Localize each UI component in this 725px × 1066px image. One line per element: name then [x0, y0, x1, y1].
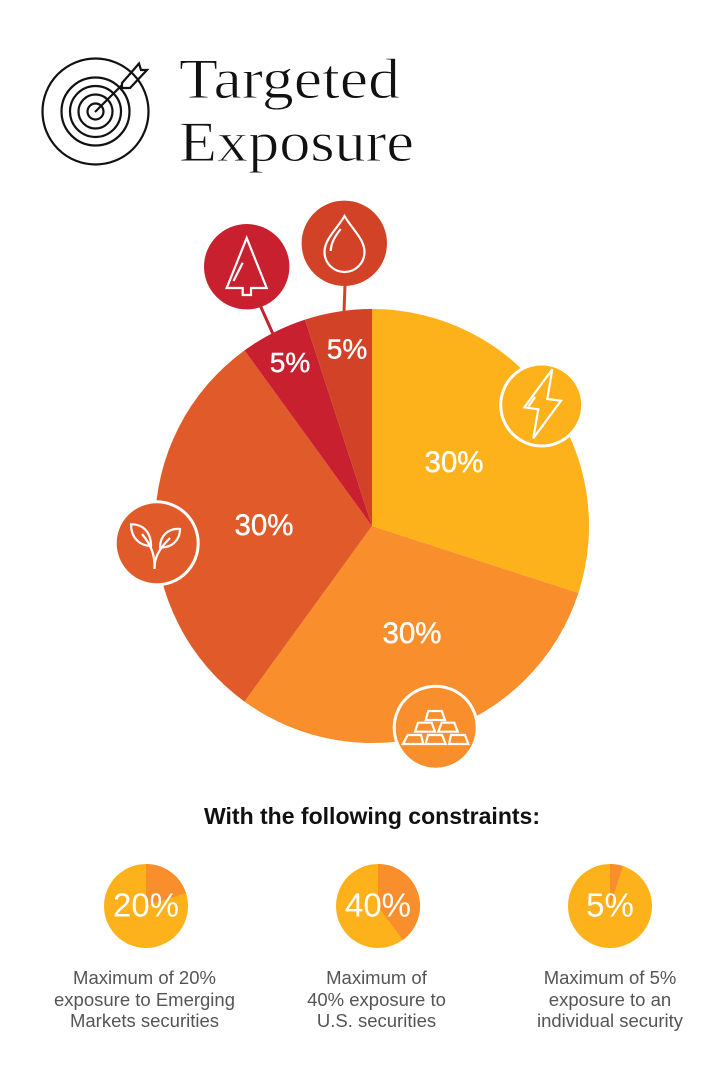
constraint: 5 percent: 5%	[586, 886, 634, 924]
connector: water icon	[344, 285, 345, 312]
title: Exposure	[179, 111, 414, 174]
constraint: 5 percent	[537, 864, 684, 1031]
heading: constraints: With the following constraints:	[204, 803, 540, 829]
icon: lightning	[501, 364, 583, 446]
icon: gold bars	[394, 686, 477, 769]
constraint: 20 percent: exposure to Emerging	[54, 989, 235, 1010]
slice labels: 30%	[234, 509, 294, 542]
constraint: 20 percent	[54, 864, 235, 1031]
title	[179, 48, 414, 174]
constraint: 20 percent: 20%	[113, 886, 179, 924]
icon: plant	[115, 502, 198, 585]
slice labels	[234, 334, 484, 650]
slice labels: 5%	[327, 334, 367, 364]
constraint: 5 percent: individual security	[537, 1010, 684, 1031]
constraint: 40 percent: 40%	[345, 886, 411, 924]
slice labels: 30%	[424, 446, 484, 479]
title: Targeted	[179, 48, 400, 111]
slice labels: 30%	[382, 617, 442, 650]
icon: water drop	[302, 201, 387, 286]
icon: tree	[204, 224, 289, 309]
constraint: 40 percent	[307, 864, 446, 1031]
pie chart: allocation	[155, 309, 589, 743]
connector: tree icon	[260, 305, 273, 334]
constraint: 40 percent: U.S. securities	[317, 1010, 436, 1031]
slice labels: 5%	[270, 347, 310, 378]
constraint: 40 percent: 40% exposure to	[307, 989, 446, 1010]
constraint: 5 percent: Maximum of 5%	[544, 967, 676, 988]
constraint: 40 percent: Maximum of	[326, 967, 428, 988]
constraint: 20 percent: Markets securities	[70, 1010, 219, 1031]
constraint: 5 percent: exposure to an	[549, 989, 671, 1010]
constraint: 20 percent: Maximum of 20%	[73, 967, 216, 988]
icon: target with arrow	[42, 58, 148, 164]
